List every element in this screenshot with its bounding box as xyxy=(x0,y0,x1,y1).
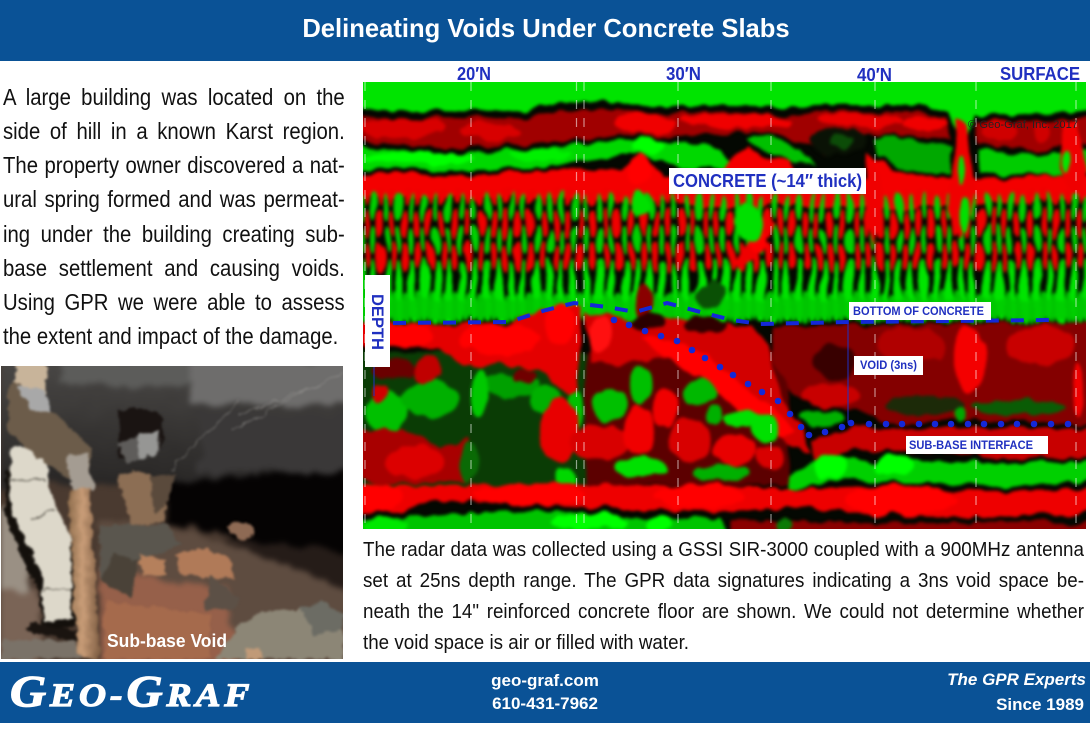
green band xyxy=(340,140,735,170)
contact xyxy=(491,671,599,713)
label: sub-base interface: SUB-BASE INTERFACE xyxy=(909,438,1033,452)
text block: building description: the extent and impact of the damage. xyxy=(3,323,338,349)
bottom green xyxy=(363,506,728,529)
axis labels: 20′N xyxy=(457,64,491,84)
mid red left xyxy=(340,430,475,484)
logo: Geo-Graf: GEO-GRAF xyxy=(10,667,253,716)
text block: building description: The property owner discovered a nat- xyxy=(3,152,345,178)
contact: 610-431-7962 xyxy=(492,694,598,713)
label: void: VOID (3ns) xyxy=(860,358,917,372)
axis labels: SURFACE xyxy=(1000,64,1080,84)
text block: radar data description: the void space is air or filled with water. xyxy=(363,632,689,654)
void dots xyxy=(611,317,1071,438)
text block: building description: ural spring formed and was permeat- xyxy=(3,186,345,212)
label: concrete: CONCRETE (~14″ thick) xyxy=(673,171,862,191)
copyright: © Geo-Graf, Inc. 2017 xyxy=(968,119,1078,131)
label: bottom of concrete: BOTTOM OF CONCRETE xyxy=(853,304,984,318)
title: Delineating Voids Under Concrete Slabs xyxy=(302,15,790,43)
mid red right xyxy=(812,428,1090,462)
text block: radar data description: neath the 14" reinforced concrete floor are shown. We could not determine whether xyxy=(363,601,1084,623)
lower green xyxy=(340,268,1090,322)
radar chart xyxy=(363,64,1086,529)
red band bottom xyxy=(340,484,1090,518)
label: depth: DEPTH xyxy=(368,294,387,350)
photo: sub-base void xyxy=(1,366,343,659)
oscillating rows xyxy=(340,190,1090,274)
text block: radar data description: The radar data was collected using a GSSI SIR-3000 coupled with a 900MHz antenna xyxy=(363,539,1084,561)
footer bar xyxy=(0,662,1090,723)
diagonal red band xyxy=(585,312,812,452)
photo caption: Sub-base Void xyxy=(107,631,227,651)
lower left red xyxy=(340,304,582,395)
axis labels: 40′N xyxy=(857,65,892,85)
green band right xyxy=(790,455,1090,490)
text block: building description: base settlement and causing voids. xyxy=(3,255,345,281)
top green xyxy=(363,82,1086,136)
axis labels xyxy=(457,64,1080,85)
contact: geo-graf.com xyxy=(491,671,599,690)
text block: building description xyxy=(3,84,345,349)
tagline: Since 1989 xyxy=(996,695,1084,714)
dark red band xyxy=(340,108,950,153)
text block: building description: Using GPR we were able to assess xyxy=(3,289,345,315)
void bracket line xyxy=(374,322,848,423)
text block: building description: side of hill in a known Karst region. xyxy=(3,118,345,144)
label: depth xyxy=(365,275,390,367)
label: void xyxy=(854,356,923,375)
text block: radar data description: set at 25ns depth range. The GPR data signatures indicating a 3ns void space be- xyxy=(363,570,1084,592)
lower left mix xyxy=(365,390,405,434)
text block: radar data description xyxy=(363,539,1084,654)
lower bases xyxy=(340,352,585,487)
tagline xyxy=(947,670,1086,714)
right red xyxy=(775,322,1090,425)
bottom of concrete dashed line xyxy=(393,303,1049,324)
grid lines xyxy=(365,82,1076,529)
bright red band xyxy=(340,145,1090,209)
tagline: The GPR Experts xyxy=(947,670,1086,689)
axis labels: 30′N xyxy=(666,64,701,84)
text block: building description: ing under the building creating sub- xyxy=(3,221,345,247)
text block: building description: A large building was located on the xyxy=(3,84,345,110)
header bar xyxy=(0,0,1090,61)
